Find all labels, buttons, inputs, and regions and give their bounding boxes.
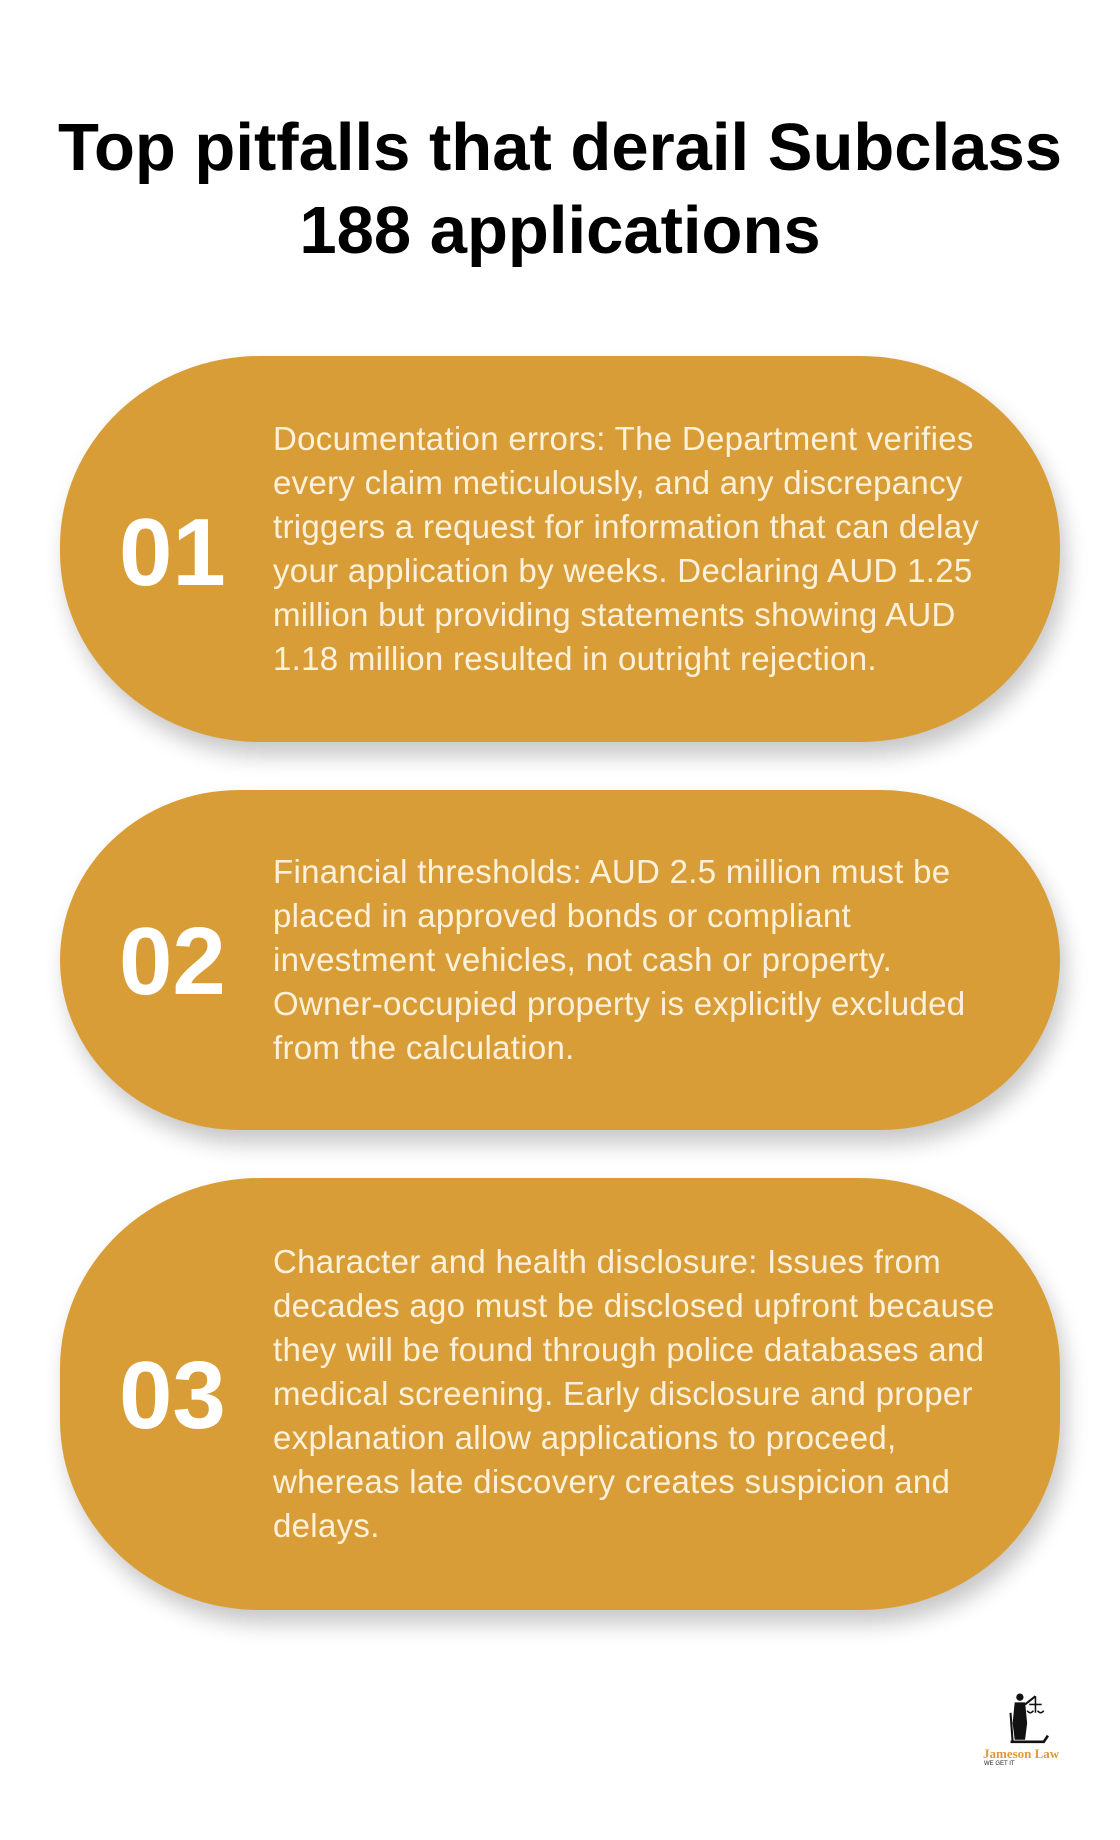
text 03: explanation allow applications to proceed, bbox=[273, 1419, 897, 1456]
logo text: Jameson Law bbox=[983, 1746, 1059, 1761]
text 01: triggers a request for information that can delay bbox=[273, 508, 979, 545]
text 02: from the calculation. bbox=[273, 1029, 575, 1066]
title bbox=[58, 110, 1062, 268]
text 03: delays. bbox=[273, 1507, 380, 1544]
text 01: million but providing statements showing AUD bbox=[273, 596, 956, 633]
text 01: 1.18 million resulted in outright rejection. bbox=[273, 640, 877, 677]
number 02: 02 bbox=[119, 908, 226, 1015]
panel: 02 financial thresholds bbox=[60, 790, 1060, 1130]
text 02: placed in approved bonds or compliant bbox=[273, 897, 851, 934]
text 03: whereas late discovery creates suspicion and bbox=[273, 1463, 950, 1500]
text 03: medical screening. Early disclosure and proper bbox=[273, 1375, 973, 1412]
text 02: investment vehicles, not cash or property. bbox=[273, 941, 892, 978]
text 01 bbox=[273, 420, 979, 677]
text 01: Documentation errors: The Department verifies bbox=[273, 420, 974, 457]
text 03: Character and health disclosure: Issues from bbox=[273, 1243, 941, 1280]
text 01: every claim meticulously, and any discrepancy bbox=[273, 464, 963, 501]
icon: lady justice bbox=[1010, 1694, 1049, 1744]
number 01: 01 bbox=[119, 499, 226, 606]
logo: Jameson Law: WE GET IT bbox=[984, 1761, 1015, 1767]
text 02: Owner-occupied property is explicitly excluded bbox=[273, 985, 965, 1022]
title: 188 applications bbox=[299, 193, 821, 268]
title: Top pitfalls that derail Subclass bbox=[58, 110, 1062, 185]
text 01: your application by weeks. Declaring AUD 1.25 bbox=[273, 552, 973, 589]
text 03: decades ago must be disclosed upfront because bbox=[273, 1287, 995, 1324]
panel: 03 character and health bbox=[60, 1178, 1060, 1610]
panel: 01 documentation errors bbox=[60, 356, 1060, 742]
text 02 bbox=[273, 853, 965, 1066]
text 02: Financial thresholds: AUD 2.5 million must be bbox=[273, 853, 950, 890]
text 03: they will be found through police databases and bbox=[273, 1331, 984, 1368]
logo: Jameson Law bbox=[983, 1694, 1060, 1767]
number 03: 03 bbox=[119, 1342, 226, 1449]
text 03 bbox=[273, 1243, 995, 1544]
